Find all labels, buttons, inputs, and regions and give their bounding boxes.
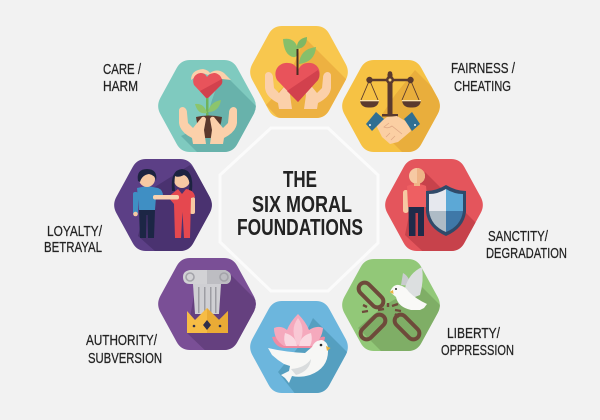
label: sanctity / degradation — [486, 228, 567, 262]
panel: person with shield (red hexagon) — [385, 159, 483, 251]
label: loyalty / betrayal: BETRAYAL — [44, 239, 102, 256]
title — [237, 166, 363, 240]
label: authority / subversion — [86, 332, 162, 367]
label: loyalty / betrayal: LOYALTY/ — [47, 223, 103, 240]
panel: lotus and dove (blue hexagon) — [250, 301, 348, 393]
label: liberty / oppression: LIBERTY/ — [447, 325, 501, 342]
title: SIX MORAL — [252, 191, 352, 217]
panel: heart and hands (top yellow hexagon) — [250, 26, 348, 118]
title: FOUNDATIONS — [237, 214, 363, 240]
infographic: the six moral foundations — [44, 26, 566, 393]
label: fairness / cheating: FAIRNESS / — [451, 60, 516, 77]
title: THE — [283, 166, 317, 192]
label: care / harm: CARE / — [103, 61, 142, 78]
label: authority / subversion: AUTHORITY/ — [86, 332, 158, 349]
panel: two people (dark purple hexagon) — [114, 159, 212, 251]
central octagon — [220, 128, 378, 291]
label: authority / subversion: SUBVERSION — [88, 350, 162, 367]
label: care / harm: HARM — [103, 78, 138, 95]
panel: broken chain and dove (green hexagon) — [342, 259, 440, 351]
label: sanctity / degradation: SANCTITY/ — [488, 228, 549, 245]
label: fairness / cheating: CHEATING — [454, 78, 511, 95]
panel: column and crown (purple hexagon) — [158, 258, 256, 350]
panel: scales and handshake (amber hexagon) — [342, 60, 440, 152]
label: loyalty / betrayal — [44, 223, 103, 256]
label: sanctity / degradation: DEGRADATION — [486, 245, 567, 262]
label: care / harm — [103, 61, 142, 95]
label: fairness / cheating — [451, 60, 516, 95]
panel: plant and hands (teal hexagon) — [158, 60, 256, 152]
label: liberty / oppression: OPPRESSION — [441, 342, 514, 359]
label: liberty / oppression — [441, 325, 514, 359]
